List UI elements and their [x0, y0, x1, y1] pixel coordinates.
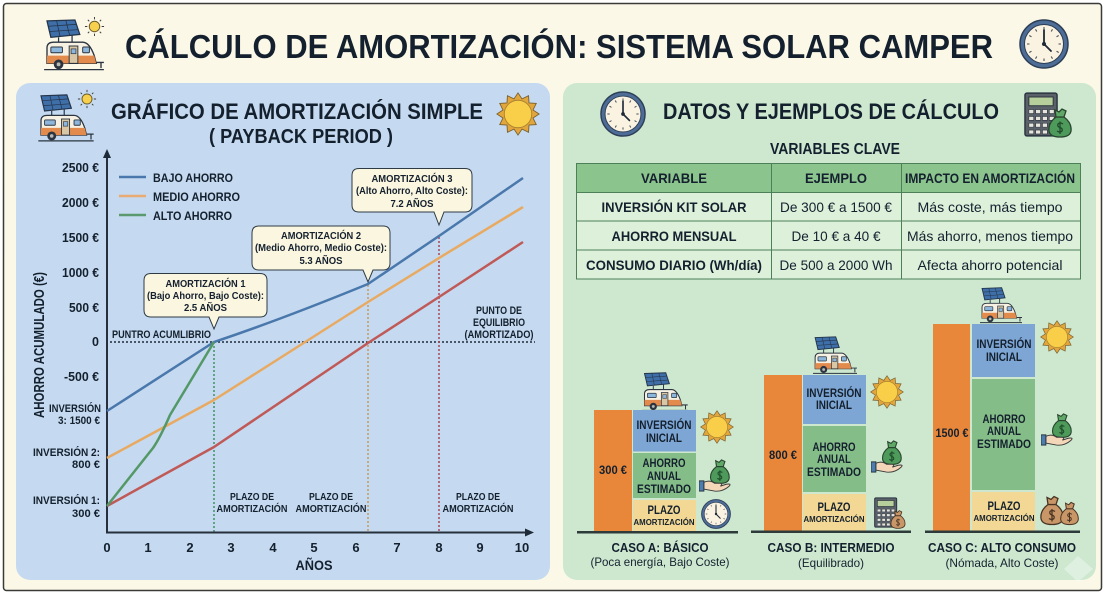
caption: case C [928, 540, 1076, 570]
icon: sun, chart panel [497, 93, 539, 135]
block: inversión inicial: INVERSIÓN [806, 387, 862, 400]
legend: BAJO AHORRO [153, 171, 233, 185]
case A: basic [577, 373, 738, 569]
caption: case A: CASO A: BÁSICO [612, 540, 708, 555]
icon: camper with solar panel, header [44, 17, 104, 70]
y axis labels: 2500 € [62, 161, 99, 175]
bar: 800 euros: 800 € [769, 450, 798, 462]
y axis title: AHORRO ACUMULADO (€) [31, 272, 48, 418]
callout: amortización 3: 7.2 AÑOS [390, 197, 434, 210]
label: break-even right: EQUILIBRIO [473, 317, 525, 329]
callout: amortización 2 [252, 226, 390, 282]
block: plazo: PLAZO [818, 502, 851, 514]
data heading: DATOS Y EJEMPLOS DE CÁLCULO [663, 99, 999, 124]
table: key variables [576, 164, 1080, 279]
block: ahorro anual [633, 453, 696, 498]
labels: payback period: AMORTIZACIÓN [442, 502, 514, 515]
x axis labels: 0 [103, 540, 111, 555]
icon: clock, data panel [601, 92, 645, 136]
caption: case A: (Poca energía, Bajo Coste) [590, 555, 730, 569]
caption: case B: (Equilibrado) [798, 556, 864, 570]
table heading: VARIABLES CLAVE [770, 141, 900, 158]
block: ahorro anual: AHORRO [642, 458, 686, 470]
legend: MEDIO AHORRO [153, 190, 240, 204]
title: CÁLCULO DE AMORTIZACIÓN: SISTEMA SOLAR CAMPER [125, 28, 993, 65]
block: ahorro anual: ESTIMADO [637, 484, 691, 496]
x axis labels: 5 [310, 540, 318, 555]
block: plazo: PLAZO [988, 501, 1021, 513]
case C: high consumption [925, 288, 1080, 570]
table row: consumo: CONSUMO DIARIO (Wh/día) [586, 257, 762, 273]
label: break-even right: (AMORTIZADO) [464, 329, 534, 341]
investment labels: 3: 1500 € [58, 415, 100, 427]
investment labels: INVERSIÓN 2: [33, 446, 100, 459]
block: plazo: AMORTIZACIÓN [634, 518, 695, 527]
icon: camper, chart panel [38, 90, 96, 141]
panel: amortization chart [16, 83, 550, 580]
x axis labels [103, 540, 529, 555]
legend [119, 171, 240, 223]
block: inversión inicial: INICIAL [816, 400, 852, 412]
labels: payback period: AMORTIZACIÓN [216, 502, 288, 515]
icon: clock, case A [702, 500, 730, 528]
x axis labels: 1 [144, 540, 152, 555]
y axis labels: 1000 € [62, 266, 99, 280]
chart heading [111, 99, 483, 148]
bar: 800 euros [764, 375, 802, 531]
icon: sun, case B [871, 376, 903, 408]
icon: camper, case C [980, 288, 1022, 323]
chart heading: ( PAYBACK PERIOD ) [209, 126, 393, 148]
table row: ahorro [612, 228, 1073, 244]
x axis labels: 4 [269, 540, 277, 555]
x axis labels: 8 [435, 540, 443, 555]
table header row: VARIABLE [641, 170, 707, 186]
x axis labels: 10 [515, 540, 529, 555]
table row: consumo: Afecta ahorro potencial [918, 257, 1062, 273]
chart heading: GRÁFICO DE AMORTIZACIÓN SIMPLE [111, 99, 483, 124]
labels: payback period [216, 491, 514, 515]
chart axes [103, 149, 534, 536]
labels: payback period: PLAZO DE [456, 491, 500, 503]
y axis labels: 0 [92, 335, 99, 349]
block: plazo [633, 500, 696, 532]
block: plazo [972, 492, 1035, 531]
x axis title: AÑOS [296, 556, 332, 573]
block: plazo: AMORTIZACIÓN [804, 515, 865, 524]
callout: amortización 3: AMORTIZACIÓN 3 [372, 172, 453, 185]
block: plazo: PLAZO [648, 505, 681, 517]
y axis labels: 500 € [69, 301, 99, 315]
x axis labels: 3 [227, 540, 235, 555]
block: ahorro anual: ESTIMADO [977, 439, 1031, 451]
block: ahorro anual: ANUAL [987, 426, 1021, 438]
y axis labels: -500 € [64, 370, 99, 384]
block: inversión inicial [633, 410, 696, 452]
bar: 1500 euros: 1500 € [936, 428, 969, 440]
callout: amortización 2: AMORTIZACIÓN 2 [281, 229, 361, 242]
callout: amortización 1: 2.5 AÑOS [184, 301, 227, 314]
table row: inversión: De 300 € a 1500 € [780, 199, 892, 215]
x axis labels: 7 [393, 540, 401, 555]
block: ahorro anual [803, 426, 866, 492]
baseline [751, 530, 911, 533]
x axis labels: 9 [476, 540, 484, 555]
y axis labels: 1500 € [62, 231, 99, 245]
investment labels [33, 402, 101, 520]
baseline [577, 531, 738, 534]
icon: sun, case C [1041, 321, 1073, 353]
caption: case B [768, 540, 894, 570]
x axis labels: 6 [352, 540, 360, 555]
panel: data and calculation examples [563, 83, 1096, 580]
label: break-even right: PUNTO DE [476, 305, 522, 317]
callout: amortización 3: (Alto Ahorro, Alto Coste): [356, 186, 468, 197]
label: break-even right [464, 305, 534, 341]
block: ahorro anual: AHORRO [812, 442, 856, 454]
labels: payback period: PLAZO DE [230, 491, 274, 503]
table row: consumo: De 500 a 2000 Wh [780, 257, 892, 273]
table row: inversión: Más coste, más tiempo [918, 199, 1063, 215]
y axis labels [62, 161, 99, 384]
block: ahorro anual: ANUAL [817, 454, 851, 466]
x axis labels: 2 [186, 540, 194, 555]
data lines [107, 178, 523, 506]
labels: payback period: PLAZO DE [309, 491, 353, 503]
investment labels: INVERSIÓN [49, 402, 101, 415]
caption: case B: CASO B: INTERMEDIO [768, 540, 894, 555]
icon: calculator and money [1025, 93, 1071, 137]
callout: amortización 1 [144, 274, 267, 329]
line chart [31, 149, 535, 573]
caption: case A [590, 540, 730, 569]
block: plazo: AMORTIZACIÓN [974, 514, 1035, 523]
block: ahorro anual: AHORRO [982, 414, 1026, 426]
label: break-even left: PUNTRO ACUMLIBRIO [112, 329, 211, 341]
callout: amortización 1: AMORTIZACIÓN 1 [166, 277, 246, 290]
block: inversión inicial: INVERSIÓN [636, 419, 692, 432]
callout: amortización 2: 5.3 AÑOS [300, 254, 343, 267]
icon: hand with money, case A [699, 460, 730, 491]
icon: clock, header [1020, 20, 1068, 68]
bar: 300 euros: 300 € [599, 465, 628, 477]
block: plazo [803, 494, 866, 531]
bar: 300 euros [594, 410, 632, 532]
block: inversión inicial: INICIAL [646, 433, 682, 445]
icon: hand with money, case C [1041, 414, 1072, 445]
table row: inversión: INVERSIÓN KIT SOLAR [602, 198, 746, 215]
block: inversión inicial [803, 375, 866, 424]
block: ahorro anual: ANUAL [647, 471, 681, 483]
block: ahorro anual [972, 379, 1035, 490]
investment labels: 300 € [72, 508, 100, 520]
callout: amortización 1: (Bajo Ahorro, Bajo Coste): [147, 291, 264, 302]
block: inversión inicial: INICIAL [986, 352, 1022, 364]
table header row: EJEMPLO [805, 170, 867, 186]
block: ahorro anual: ESTIMADO [807, 467, 861, 479]
case B: intermediate [751, 337, 911, 570]
investment labels: INVERSIÓN 1: [33, 494, 100, 507]
baseline [925, 530, 1080, 533]
icon: money bags [1041, 496, 1078, 525]
legend: ALTO AHORRO [153, 209, 232, 223]
callout: amortización 2: (Medio Ahorro, Medio Coste): [255, 243, 387, 254]
guide lines [110, 237, 535, 532]
icon: sun, case A [701, 411, 733, 443]
caption: case C: (Nómada, Alto Coste) [946, 556, 1058, 570]
icon: camper, case A [642, 373, 688, 410]
callout: amortización 3 [352, 168, 472, 225]
labels: payback period: AMORTIZACIÓN [296, 502, 366, 515]
table row: ahorro: Más ahorro, menos tiempo [907, 228, 1073, 244]
icon: camper, case B [813, 337, 857, 373]
icon: hand with money, case B [871, 441, 902, 472]
icon: calculator and money, case B [875, 498, 905, 528]
table header row [641, 169, 1075, 186]
investment labels: 800 € [72, 459, 100, 471]
caption: case C: CASO C: ALTO CONSUMO [928, 540, 1076, 555]
table row: consumo [586, 257, 1062, 273]
y axis labels: 2000 € [62, 196, 99, 210]
table row: inversión [602, 198, 1063, 215]
table header row: IMPACTO EN AMORTIZACIÓN [905, 169, 1075, 186]
table row: ahorro: AHORRO MENSUAL [612, 228, 737, 244]
bar: 1500 euros [933, 324, 970, 531]
table row: ahorro: De 10 € a 40 € [792, 228, 881, 244]
block: inversión inicial: INVERSIÓN [976, 338, 1032, 351]
block: inversión inicial [972, 324, 1035, 377]
